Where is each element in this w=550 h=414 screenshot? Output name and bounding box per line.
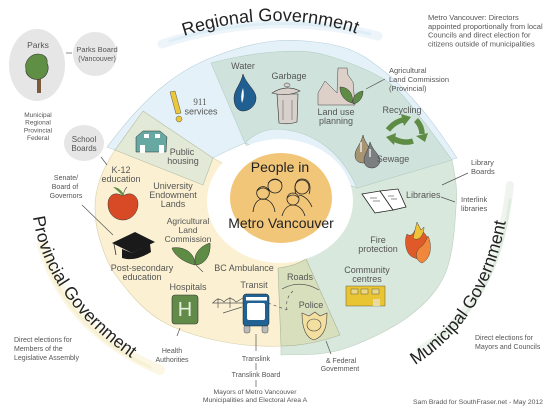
title: municipal government: Municipal Government <box>410 220 506 364</box>
text: metro vancouver note: Councils and direct election for <box>428 31 531 40</box>
text: library boards: Library <box>471 158 494 167</box>
text: levels of government: Federal <box>27 135 50 142</box>
text: libraries: Libraries <box>406 190 441 200</box>
text: senate: Governors <box>50 193 83 200</box>
connector: federal <box>326 341 331 354</box>
text: 911 services: 911 <box>193 97 207 107</box>
text: fire protection: Fire <box>370 235 386 245</box>
text: municipal elections: Direct elections for <box>475 335 534 342</box>
text: land use planning: planning <box>319 116 353 126</box>
text: mayors: Mayors of Metro Vancouver <box>214 389 297 396</box>
panel: roads and police overlap <box>278 259 340 346</box>
text: roads: Roads <box>287 272 314 282</box>
panel: provincial government band <box>95 150 308 346</box>
text: provincial elections: Members of the <box>14 346 63 353</box>
text: public housing: Public <box>170 147 195 157</box>
icon: book <box>362 189 406 213</box>
text: university endowment lands: Endowment <box>149 190 197 200</box>
heading: people in: People in <box>251 159 309 175</box>
text: municipal elections: Mayors and Councils <box>475 344 541 351</box>
brush stroke: municipal <box>420 185 510 350</box>
panel: parks board <box>73 32 118 76</box>
text: agricultural land commission: Agricultural <box>167 216 209 226</box>
text: k-12 education: K-12 <box>111 165 131 175</box>
title: regional government: Regional Government <box>182 8 360 36</box>
text: university endowment lands: University <box>153 181 193 191</box>
text: community centres: centres <box>352 274 382 284</box>
text: health authorities: Health <box>162 348 182 355</box>
icon: apple <box>108 187 138 220</box>
text: federal government: & Federal <box>326 358 357 365</box>
icon: hospital <box>172 295 198 324</box>
text: agricultural land commission provincial: (Provincial) <box>389 84 427 93</box>
icon: recycling arrows <box>386 114 428 145</box>
icon: fire <box>406 222 430 263</box>
connector: school boards <box>101 157 107 165</box>
icon: sewage drops <box>355 135 380 168</box>
icon: exclamation <box>170 91 182 122</box>
text: credit: Sam Bradd for SouthFraser.net - May 2012 <box>413 399 543 406</box>
panel: people in metro vancouver <box>228 153 334 243</box>
text: translink board: Translink Board <box>232 372 280 379</box>
connector: libraries <box>441 197 455 202</box>
text: library boards: Boards <box>471 167 495 176</box>
connector: health <box>177 328 180 336</box>
connector: senate <box>82 205 113 235</box>
text: health authorities: Authorities <box>155 357 189 364</box>
icon: graduation cap <box>112 232 155 259</box>
connector: translink board <box>255 363 257 370</box>
text: k-12 education: education <box>101 174 141 184</box>
icon: hospital: H <box>178 299 192 321</box>
icon: land use buildings <box>318 68 355 105</box>
icon: garbage can <box>272 83 300 124</box>
text: sewage: Sewage <box>377 154 409 164</box>
connector: mayors <box>255 380 257 387</box>
text: agricultural land commission provincial: Agricultural <box>389 66 427 75</box>
panel: school boards: School <box>72 135 96 144</box>
text: levels of government: Regional <box>25 120 51 127</box>
icon: road <box>268 284 319 310</box>
brush stroke: provincial <box>42 245 160 370</box>
text: senate: Board of <box>52 184 78 191</box>
text: mayors: Municipalities and Electoral Area A <box>203 397 308 404</box>
text: interlink libraries: Interlink <box>461 195 488 204</box>
text: metro vancouver note: appointed proportionally from local <box>428 22 543 31</box>
text: agricultural land commission provincial: Land Commission <box>389 75 449 84</box>
connector: agricultural <box>366 79 385 89</box>
icon: bus <box>243 294 269 333</box>
connector: library boards <box>442 173 468 185</box>
panel: municipal government band <box>245 143 457 355</box>
panel: regional and municipal overlap <box>211 51 452 188</box>
connector: parks to board <box>66 52 72 54</box>
brush stroke: regional <box>162 24 378 44</box>
text: metro vancouver note: Metro Vancouver: Directors <box>428 13 519 22</box>
text: interlink libraries: libraries <box>461 204 488 213</box>
text: transit: Transit <box>240 280 268 290</box>
panel: parks board: (Vancouver) <box>78 56 116 63</box>
icon: bridge <box>212 297 243 313</box>
text: water: Water <box>231 61 255 71</box>
text: post-secondary education: education <box>122 272 162 282</box>
panel: public housing overlap <box>115 111 213 185</box>
text: metro vancouver note: citizens outside of municipalities <box>428 39 535 48</box>
text: land use planning: Land use <box>317 107 355 117</box>
panel: parks <box>9 29 65 101</box>
text: bc ambulance: BC Ambulance <box>214 263 274 273</box>
panel: school boards: Boards <box>71 144 97 153</box>
text: agricultural land commission: Commission <box>165 234 212 244</box>
text: police: Police <box>299 300 323 310</box>
title: provincial government: Provincial Government <box>33 216 136 358</box>
text: provincial elections: Legislative Assembly <box>14 355 79 362</box>
text: university endowment lands: Lands <box>161 199 186 209</box>
text: fire protection: protection <box>358 244 398 254</box>
text: community centres: Community <box>344 265 390 275</box>
icon: tree <box>26 54 48 93</box>
text: hospitals: Hospitals <box>169 282 207 292</box>
icon: land use leaf <box>340 87 363 104</box>
text: parks: Parks <box>27 40 49 50</box>
panel: school boards <box>64 125 104 161</box>
text: recycling: Recycling <box>382 105 422 115</box>
text: levels of government: Municipal <box>24 112 52 119</box>
panel: parks board: Parks Board <box>76 45 118 54</box>
text: senate: Senate/ <box>54 175 78 182</box>
connector: translink <box>255 334 257 351</box>
icon: public housing <box>136 131 167 153</box>
text: levels of government: Provincial <box>24 127 53 134</box>
panel: white centre <box>207 139 353 263</box>
text: garbage: Garbage <box>271 71 307 81</box>
text: provincial elections: Direct elections for <box>14 337 73 344</box>
icon: water drop <box>234 74 256 111</box>
panel: regional government band <box>107 40 457 188</box>
icon: police badge <box>302 312 327 340</box>
icon: leaves <box>172 243 210 272</box>
text: agricultural land commission: Land <box>179 225 198 235</box>
text: federal government: Government <box>321 366 359 373</box>
heading: metro vancouver: Metro Vancouver <box>228 215 334 231</box>
text: translink: Translink <box>242 356 271 363</box>
text: 911 services: services <box>184 106 218 116</box>
text: public housing: housing <box>167 156 199 166</box>
text: post-secondary education: Post-secondary <box>111 263 174 273</box>
icon: community centre <box>346 286 385 306</box>
icon: family <box>253 179 312 216</box>
